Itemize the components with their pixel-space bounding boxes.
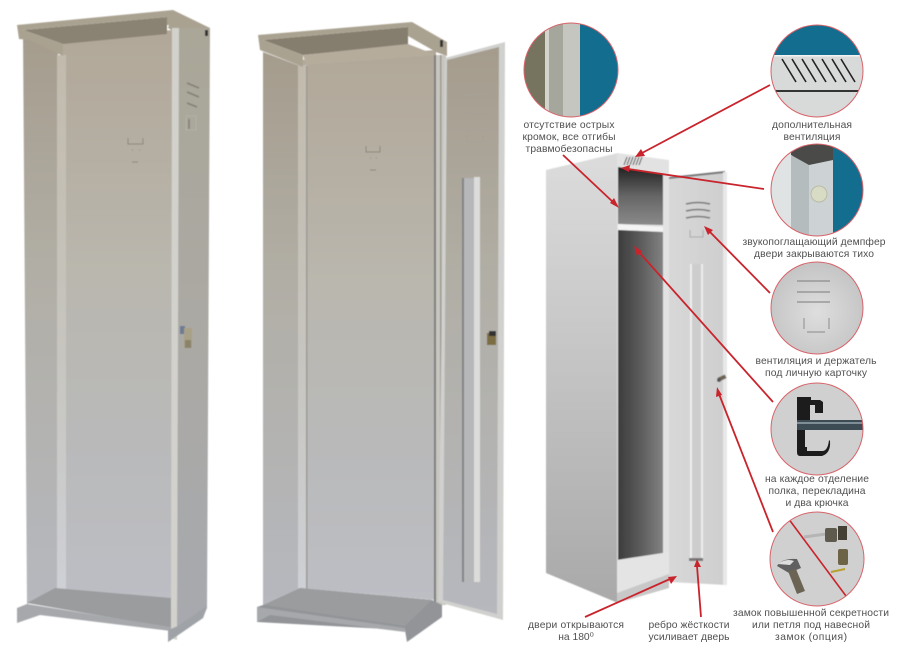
label text: звукопоглащающий демпфер: [742, 236, 886, 248]
callout: lock: [733, 512, 889, 643]
door vents and holder: [466, 94, 488, 142]
label: stiffening rib: ребро жёсткости: [648, 619, 730, 631]
callout: damper: [742, 144, 886, 260]
left locker lock: [180, 326, 192, 348]
left locker back card holder: [128, 138, 143, 162]
detail circle: vents: [771, 262, 863, 354]
arrow: hook: [634, 246, 773, 402]
left locker inner side wall: [23, 32, 58, 604]
detail circle: hook: [771, 383, 863, 475]
arrow: rib: [694, 559, 701, 617]
label text: дополнительная: [772, 120, 852, 131]
photo: closed-view locker without door: [17, 10, 210, 642]
callout: vents and card holder: под личную карточку: [765, 368, 868, 379]
left locker roof underside: [23, 17, 167, 44]
callout: no sharp edges: травмобезопасны: [526, 143, 612, 155]
callout: vents and card holder: [756, 262, 876, 379]
left locker back wall: [63, 30, 172, 600]
middle locker inner side wall: [263, 52, 300, 605]
locker side panel: [546, 153, 618, 603]
middle locker top frame: [258, 22, 447, 67]
arrow: damper: [621, 165, 764, 189]
detail circle: folded edge: [524, 23, 618, 117]
label text: на каждое отделение: [765, 474, 869, 485]
middle locker floor: [257, 588, 442, 642]
label: door opens 180: [528, 620, 624, 643]
compartment floor: [617, 552, 669, 593]
photo: open-door locker: [257, 22, 505, 642]
top vent: [624, 157, 642, 165]
arrow: lock: [716, 387, 773, 532]
door lock: [487, 331, 496, 345]
label text: отсутствие острых: [524, 120, 615, 131]
middle locker back holder: [366, 146, 380, 170]
lower compartment: [618, 230, 663, 560]
middle locker front post left: [298, 65, 307, 590]
callout: damper: двери закрываются тихо: [754, 249, 874, 260]
left locker door post: [171, 28, 179, 640]
middle locker right post: [434, 55, 446, 605]
label: door opens 180: на 180⁰: [558, 632, 594, 643]
photo: annotated locker: [546, 153, 727, 603]
callout: hook and crossbar: [765, 383, 869, 509]
arrow: extra ventilation: [635, 85, 770, 157]
arrow: card holder: [704, 226, 770, 293]
left locker top frame: [17, 10, 173, 56]
label text: замок повышенной секретности: [733, 608, 889, 619]
left locker front lip: [17, 604, 176, 642]
label: stiffening rib: [648, 619, 730, 643]
label: stiffening rib: усиливает дверь: [648, 632, 730, 643]
detail circle: locks: [770, 512, 864, 606]
door stiffening rib: [462, 177, 480, 582]
left locker vents: [187, 83, 199, 129]
arrows: [563, 85, 773, 617]
callout: extra ventilation: [771, 25, 863, 143]
door rib: [689, 264, 703, 561]
label text: вентиляция и держатель: [756, 356, 876, 367]
door: [669, 171, 727, 585]
arrow: door opens: [585, 576, 677, 617]
detail circle: slots: [771, 25, 863, 117]
callout: no sharp edges: кромок, все отгибы: [522, 131, 616, 143]
callout: hook and crossbar: полка, перекладина: [768, 486, 866, 497]
door lock: [717, 374, 726, 382]
label: door opens 180: двери открываются: [528, 620, 624, 631]
left locker floor: [27, 588, 171, 628]
middle locker door: [438, 42, 505, 620]
middle locker roof underside: [263, 27, 408, 55]
upper compartment: [618, 167, 663, 225]
door vents: [686, 202, 710, 218]
callout: no sharp edges: [522, 23, 618, 155]
left locker front post: [57, 55, 66, 590]
callout: lock: или петля под навесной: [752, 620, 870, 631]
detail circle: damper: [771, 144, 863, 236]
shelf: [618, 224, 663, 232]
callout: hook and crossbar: и два крючка: [786, 498, 849, 509]
locker front face: [617, 153, 669, 603]
arrow: sharp edges: [563, 155, 619, 208]
callout: lock: замок (опция): [775, 632, 847, 643]
left locker side panel: [168, 28, 210, 642]
middle locker back wall: [300, 50, 436, 600]
card holder: [690, 230, 703, 237]
callout: extra ventilation: вентиляция: [784, 132, 840, 143]
